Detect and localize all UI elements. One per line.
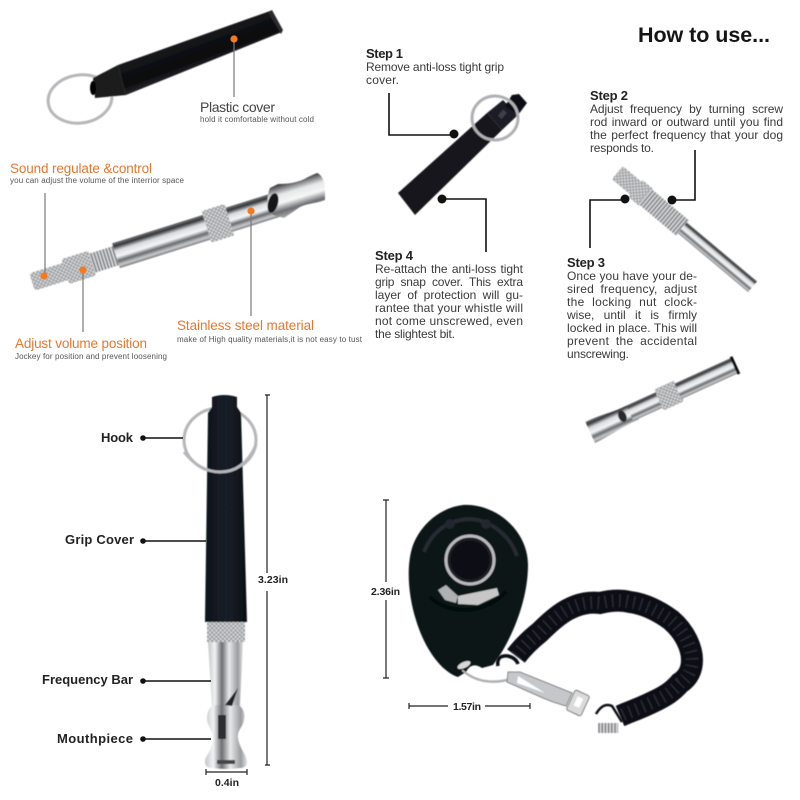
label: plastic cover: Plastic cover [200,99,275,115]
text: step 4: layer of protection will gu- [375,288,523,302]
panel: step 2 and step 3 [566,88,783,443]
icon: silver whistle [27,173,325,297]
text: step 3: wise, until it is firmly [566,308,697,322]
icon: coil wrist strap [498,601,692,716]
callout line: plastic cover [233,39,235,97]
text: step 4: rantee that your whistle will [375,301,523,315]
text: step 4: grip snap cover. This extra [375,275,523,289]
callout: frequency bar [42,672,211,687]
dimension: width 0.4in [206,769,247,789]
marker: step 1 [450,130,458,138]
text: step 4: Re-attach the anti-loss tight [375,262,524,276]
icon: assembled silver whistle [585,354,741,443]
callout: grip cover: Grip Cover [65,532,134,547]
text: step 2: Adjust frequency by turning screw [590,102,783,116]
text: step 3: the locking nut clock- [567,295,697,309]
marker: step 3 [620,194,630,204]
icon: snap hook and ring [462,670,622,733]
caption: plastic cover: hold it comfortable without cold [200,115,314,124]
text: step 4: the slightest bit. [375,327,455,341]
text: step 2: Step 2 [590,88,628,103]
marker: step 2 [668,196,676,204]
icon: vertical whistle with grip cover [184,395,256,769]
text: step 2: responds to. [590,141,654,155]
callout: grip cover [65,532,206,547]
icon: silver screw rod [610,165,760,295]
dimension: width 1.57in [409,701,530,713]
marker: stainless steel [247,207,255,215]
text: step 3: prevent the accidental [567,334,697,348]
label: stainless steel: Stainless steel material [177,318,314,333]
callout: mouthpiece: Mouthpiece [57,731,133,746]
text: step 3: locked in place. This will [567,321,697,335]
dimension: height 3.23in [258,395,288,765]
label: adjust volume: Adjust volume position [15,336,147,351]
callout line: adjust volume [82,270,84,332]
text: step 3: Step 3 [567,255,605,270]
text: step 3: sired frequency, adjust [567,282,698,296]
callout line: stainless steel [250,211,252,316]
panel: whistle dimensions [42,395,288,789]
marker: plastic cover [230,35,238,43]
marker: adjust volume [79,266,87,274]
panel: clicker with wrist coil [371,500,692,733]
text: step 2: rod inward or outward until you find [590,115,783,129]
text: step 1: cover. [366,73,399,87]
panel: plastic cover whistle [45,10,314,127]
text: step 3 [566,255,698,361]
dimension: height 3.23in: 3.23in [258,574,288,586]
callout: hook [101,430,183,445]
text: step 1: Remove anti-loss tight grip [366,60,504,74]
text: step 3: unscrewing. [567,347,629,361]
callout line: step 4 [442,199,486,252]
dimension: width 1.57in: 1.57in [453,701,481,713]
callout line: step 1 [389,93,454,135]
label: sound regulate: Sound regulate &control [10,161,152,176]
text: step 2 [590,88,783,155]
callout line: sound regulate [44,193,46,276]
text: step 4 [375,248,524,341]
text: step 4: Step 4 [375,248,414,263]
panel: step 1 and step 4 [366,46,527,341]
text: step 1: Step 1 [366,46,403,61]
caption: adjust volume: Jockey for position and prevent loosening [15,352,167,361]
callout line: step 2 [672,150,695,200]
caption: stainless steel: make of High quality materials,it is not easy to tust [177,335,363,344]
icon: clicker body [409,505,528,677]
dimension: width 0.4in: 0.4in [215,777,239,789]
text: step 4: not come unscrewed, even [375,314,523,328]
callout: mouthpiece [57,731,211,746]
dimension: height 2.36in [371,500,400,678]
marker: sound regulate [40,272,48,280]
text: step 1 [366,46,504,87]
title: How to use... [638,23,770,47]
caption: sound regulate: you can adjust the volume of the interrior space [10,176,185,185]
dimension: height 2.36in: 2.36in [371,586,400,598]
icon: black whistle with ring [45,10,283,127]
panel: stainless whistle parts [10,161,363,361]
marker: step 4 [438,194,446,204]
callout: hook: Hook [101,430,134,445]
callout line: step 3 [590,200,625,248]
text: step 2: the perfect frequency that your dog [590,128,783,142]
callout: frequency bar: Frequency Bar [42,672,133,687]
text: step 3: Once you have your de- [567,269,697,283]
icon: black whistle diagonal [398,94,527,215]
